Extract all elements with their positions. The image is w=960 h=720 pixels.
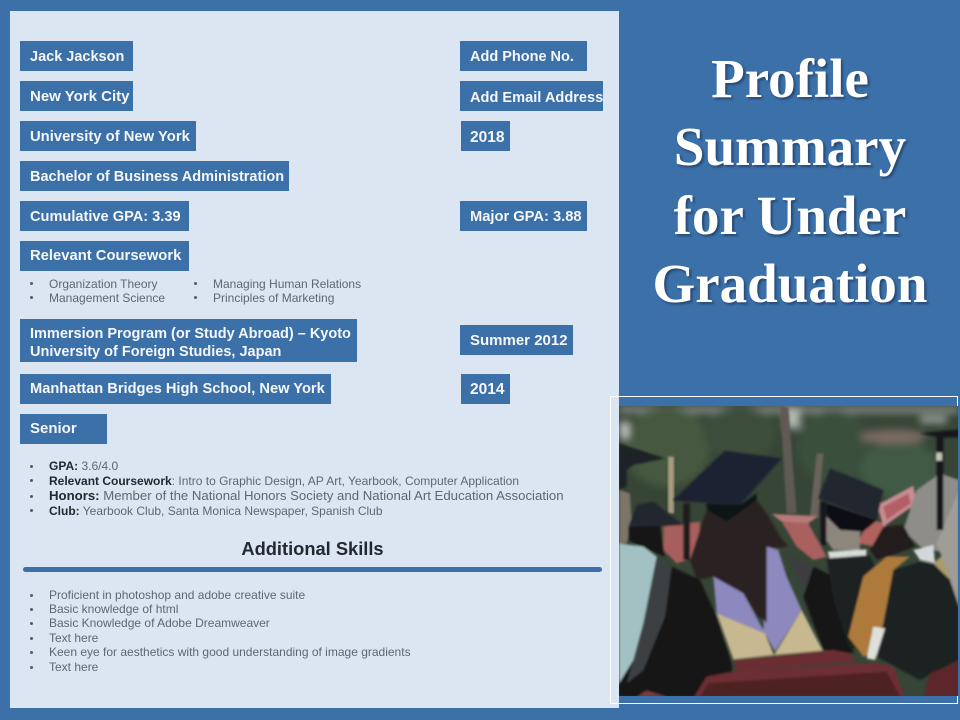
label: high school: Manhattan Bridges High School, New York xyxy=(30,381,325,397)
trunks xyxy=(780,407,797,513)
skills list: Basic knowledge of html xyxy=(49,602,178,616)
label: major GPA: Major GPA: 3.88 xyxy=(470,209,582,225)
label: cumulative GPA: Cumulative GPA: 3.39 xyxy=(30,209,181,225)
far left cap xyxy=(619,443,665,490)
lavender hood xyxy=(713,547,802,652)
high school details list: Club: Yearbook Club, Santa Monica Newspaper, Spanish Club xyxy=(49,504,383,518)
label: city: New York City xyxy=(30,88,129,105)
label: university xyxy=(20,121,196,151)
gold right xyxy=(932,556,950,580)
gold hood xyxy=(717,610,823,659)
coursework list, right column xyxy=(194,277,361,305)
panel: profile details xyxy=(10,11,619,708)
center gown back xyxy=(790,556,814,592)
label: senior xyxy=(20,414,107,444)
second cap left xyxy=(628,502,683,527)
right center cap xyxy=(818,468,883,521)
title: for Under xyxy=(674,185,906,246)
orange hood xyxy=(848,557,910,657)
pale hood xyxy=(619,543,657,683)
white collar xyxy=(913,545,935,563)
high school details list: Honors: Member of the National Honors Society and National Art Education Association xyxy=(49,488,564,503)
divider bar xyxy=(23,567,602,572)
label: cumulative GPA xyxy=(20,201,189,231)
grey hair strands right xyxy=(937,490,959,607)
skills list xyxy=(30,588,411,674)
far left head xyxy=(619,490,632,543)
photo: graduates in caps and gowns seen from behind xyxy=(619,406,958,696)
label: immersion program xyxy=(20,319,357,362)
label: immersion date xyxy=(460,325,573,355)
label: graduation year xyxy=(461,121,510,151)
distant pink caps and gowns xyxy=(663,522,700,563)
label: high school year xyxy=(461,374,510,404)
label: email xyxy=(460,81,603,111)
high school details list: GPA: 3.6/4.0 xyxy=(49,459,118,473)
skills list: Text here xyxy=(49,631,98,645)
skills list: Proficient in photoshop and adobe creative suite xyxy=(49,588,305,602)
label: phone xyxy=(460,41,587,71)
label: major GPA xyxy=(460,201,587,231)
label: relevant coursework: Relevant Coursework xyxy=(30,248,181,264)
label: immersion program: Immersion Program (or Study Abroad) – Kyoto xyxy=(30,326,351,342)
hair right xyxy=(903,473,959,557)
high school details list: Relevant Coursework: Intro to Graphic Design, AP Art, Yearbook, Computer Application xyxy=(49,474,519,488)
card on cap xyxy=(877,486,917,527)
label: graduation year: 2018 xyxy=(470,129,504,146)
title: Profile xyxy=(711,48,869,109)
high school details list xyxy=(30,459,564,518)
left gown xyxy=(619,547,733,697)
label: senior: Senior xyxy=(30,420,77,437)
title xyxy=(652,48,930,314)
right center gown xyxy=(827,555,880,650)
label: name: Jack Jackson xyxy=(30,49,124,65)
coursework list, right column: Principles of Marketing xyxy=(213,291,334,305)
main cap xyxy=(673,451,782,505)
label: high school year: 2014 xyxy=(470,381,504,398)
label: degree xyxy=(20,161,289,191)
label: immersion program: University of Foreign Studies, Japan xyxy=(30,344,281,360)
label: immersion date: Summer 2012 xyxy=(470,332,568,349)
coursework list, left column xyxy=(30,277,165,305)
title: Summary xyxy=(674,116,906,177)
coursework list, right column: Managing Human Relations xyxy=(213,277,361,291)
title: Graduation xyxy=(652,253,928,314)
label: high school xyxy=(20,374,331,404)
coursework list, left column: Management Science xyxy=(49,291,165,305)
right gown xyxy=(877,562,959,680)
skills list: Keen eye for aesthetics with good understanding of image gradients xyxy=(49,645,411,659)
dark hair behind xyxy=(870,525,915,560)
photo frame xyxy=(610,396,958,704)
skills list: Basic Knowledge of Adobe Dreamweaver xyxy=(49,616,270,630)
chairs xyxy=(733,650,857,672)
label: phone: Add Phone No. xyxy=(470,49,574,65)
heading: additional skills: Additional Skills xyxy=(241,538,384,559)
label: email: Add Email Address xyxy=(470,90,603,106)
skills list: Text here xyxy=(49,660,98,674)
label: name xyxy=(20,41,133,71)
grey-haired graduate neck xyxy=(823,513,860,550)
long hair xyxy=(690,500,788,620)
coursework list, left column: Organization Theory xyxy=(49,277,158,291)
label: city xyxy=(20,81,133,111)
label: relevant coursework xyxy=(20,241,189,271)
label: university: University of New York xyxy=(30,129,190,145)
label: degree: Bachelor of Business Administration xyxy=(30,169,284,185)
